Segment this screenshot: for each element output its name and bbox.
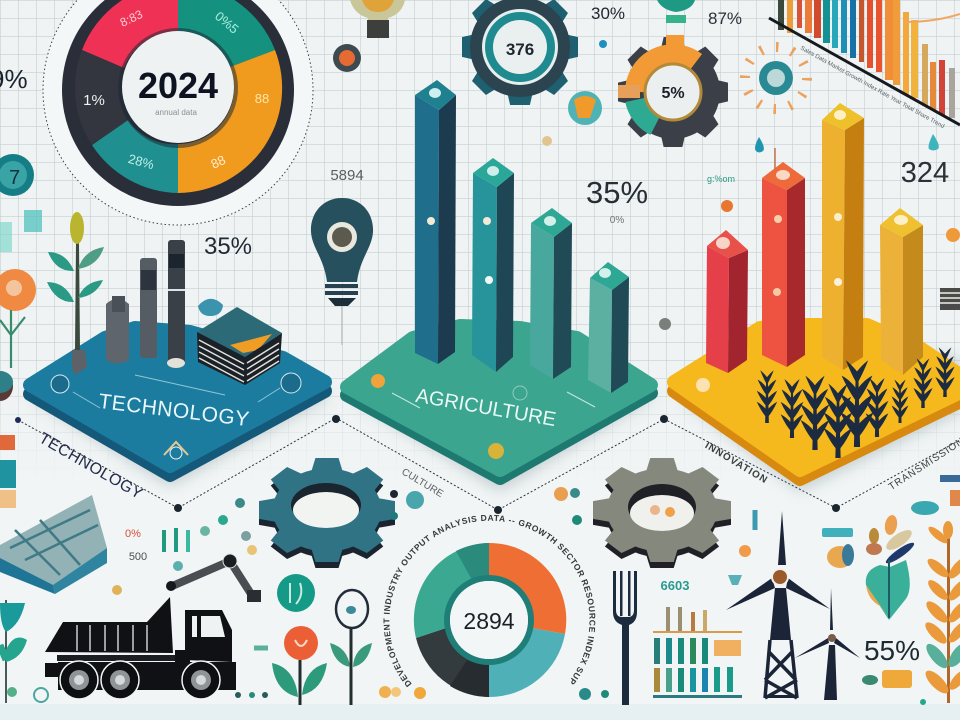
- sapling on platform: [47, 212, 104, 375]
- small bar chart: 6603: [661, 578, 689, 593]
- panel: technology platform: [30, 212, 330, 485]
- chart: top right bars: Sales Data Market Growth Index Rate Year Total Share Trend: [799, 46, 945, 130]
- small data marks near truck: 0%: [125, 528, 141, 540]
- donut chart 2024: annual data: [155, 108, 197, 117]
- donut chart 2024: 88: [208, 152, 228, 172]
- bar chart: teal bars: [415, 80, 629, 393]
- technology label: TECHNOLOGY: [97, 390, 251, 431]
- small drops and dots: [542, 40, 960, 330]
- percent label 55%: 55%: [864, 635, 920, 666]
- marks around donut: [390, 487, 609, 700]
- icon: gear 5%: 5%: [661, 85, 685, 102]
- label: industry outer: INNOVATION: [703, 440, 770, 486]
- percent label 35% large: 35%: [586, 175, 648, 210]
- blue gem above platform: [198, 299, 223, 316]
- icon: grey gear: [593, 458, 731, 568]
- panel: agriculture platform: [347, 80, 655, 490]
- icon: ring flower: [330, 590, 372, 705]
- icon: sun badge: [745, 47, 807, 109]
- icon: dump truck: [45, 554, 261, 699]
- code label: 5894: [330, 167, 364, 184]
- percent label 35% large: 0%: [610, 215, 624, 226]
- icon: teal orange badge: [568, 91, 602, 125]
- cuboid on platform: [197, 307, 282, 385]
- donut chart 2024: [43, 0, 313, 225]
- left edge icons: 7: [9, 167, 20, 189]
- icon: left teal plant: [0, 600, 27, 703]
- icon: fork: [613, 571, 637, 705]
- donut chart 2024: 8:83: [118, 7, 145, 30]
- donut chart 2024: 0%5: [212, 8, 242, 37]
- platform icons: [51, 373, 301, 459]
- icon: large wind turbine: [726, 511, 830, 698]
- donut chart 2894: [384, 514, 596, 697]
- small drops and dots: g:%om: [707, 174, 735, 184]
- crop rows: [757, 347, 955, 458]
- donut chart 2024: 1%: [83, 92, 105, 109]
- label: culture outer: CULTURE: [399, 467, 445, 500]
- icon: teal gear: [259, 458, 395, 568]
- percent label 87%: 87%: [708, 9, 742, 28]
- icon: gear 5%: [618, 35, 728, 147]
- number label 324: 324: [901, 157, 949, 189]
- panel: yellow crop platform: [674, 103, 960, 490]
- donut chart 2894: 2894: [463, 608, 515, 634]
- donut chart 2024: 28%: [127, 151, 156, 172]
- agriculture label: AGRICULTURE: [414, 385, 558, 431]
- donut chart 2024: 88: [255, 91, 269, 106]
- percent label 35% large: [586, 175, 648, 226]
- icon: top green blocks: [657, 0, 695, 23]
- icon: small wind turbine: [795, 588, 860, 700]
- donut chart 2024: 2024: [138, 65, 218, 106]
- connector lines with dots: [15, 415, 960, 514]
- small marks bottom right: [862, 475, 960, 705]
- icon: orange flower: [272, 626, 327, 705]
- cylinders on platform: [106, 240, 185, 368]
- label: technology outer: TECHNOLOGY: [36, 430, 146, 503]
- icon: teal card and blob: [728, 510, 854, 585]
- percent label 35% small: 35%: [204, 233, 252, 260]
- platform icons: [371, 374, 595, 459]
- icon: wheat stalk: [922, 521, 960, 703]
- icon: teal badge: [277, 574, 315, 612]
- icon: circuit box: [0, 495, 107, 594]
- small bar chart: [653, 578, 742, 698]
- donut chart 2894: DEVELOPMENT INDUSTRY OUTPUT ANALYSIS DATA -- GROWTH SECTOR RESOURCE INDEX SUPPLY CHAIN DATA MARKET: [384, 514, 596, 688]
- percent label 30%: 30%: [591, 4, 625, 23]
- small marks bottom center-left: [7, 648, 401, 702]
- platform icons: [696, 378, 710, 392]
- icon: colored leaf: [866, 514, 916, 620]
- left edge icons: [0, 154, 42, 508]
- icon: gear 376: [462, 0, 578, 105]
- icon: light bulb: [311, 198, 373, 345]
- icon: gear 376: 376: [506, 40, 534, 59]
- icon: small top bulb: [350, 0, 405, 38]
- bar chart: red and yellow bars: [706, 103, 923, 375]
- small data marks near truck: 500: [129, 551, 147, 563]
- small data marks near truck: [112, 498, 257, 595]
- chart: top right bars: [769, 0, 960, 130]
- icon: orange target badge: [333, 44, 361, 72]
